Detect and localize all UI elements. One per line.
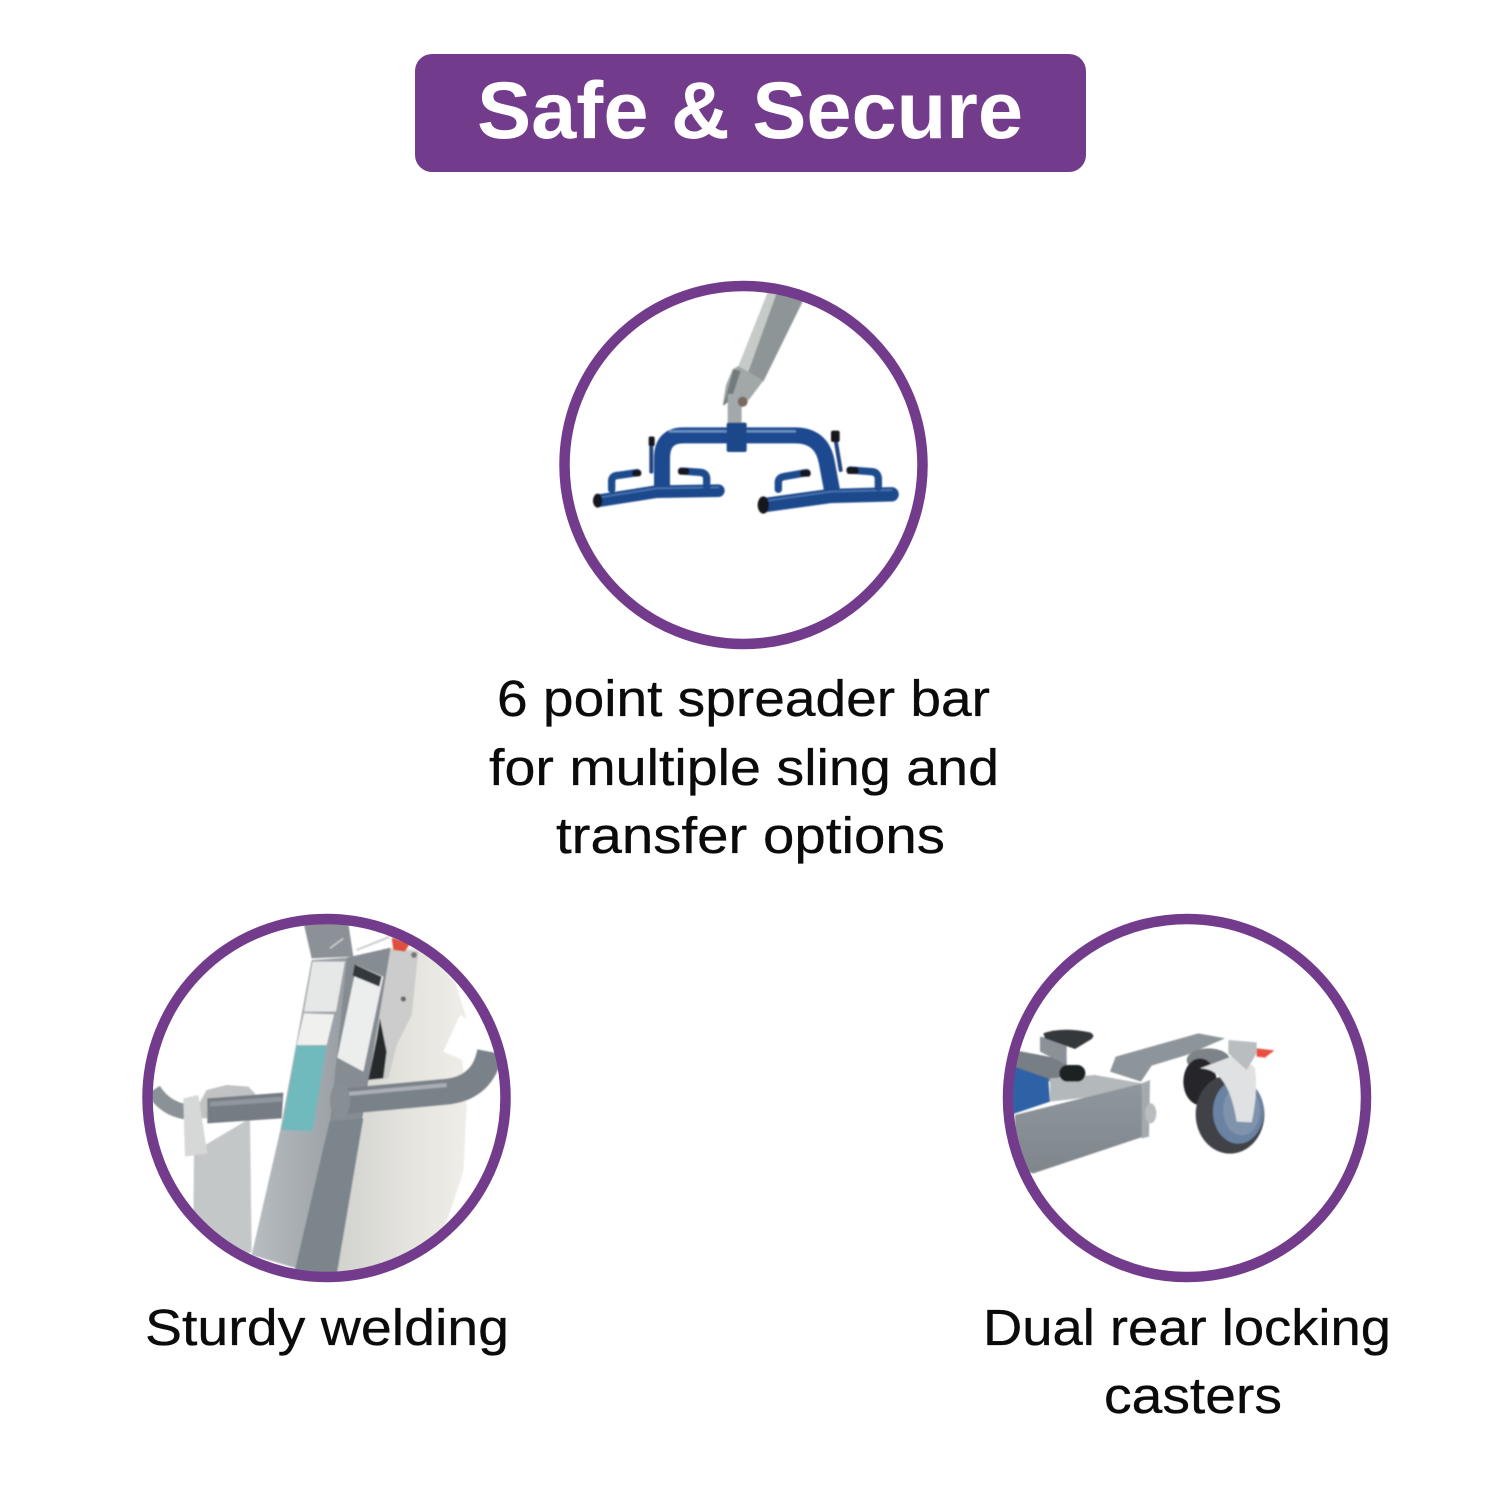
purple ring [148, 919, 506, 1277]
purple ring [1008, 919, 1366, 1277]
caption: locking casters: casters [1104, 1367, 1282, 1424]
panel: spreader bar [489, 286, 999, 864]
panel: sturdy welding [145, 919, 509, 1356]
caption: locking casters: Dual rear locking [983, 1299, 1391, 1356]
icon: caster wheel photo [1005, 1030, 1274, 1173]
caption: locking casters [983, 1299, 1391, 1424]
icon: welded mast photo [153, 922, 503, 1275]
panel: locking casters [983, 919, 1391, 1424]
title: Safe & Secure [477, 66, 1023, 156]
icon: spreader bar photo [593, 287, 892, 514]
caption: spreader bar [489, 670, 999, 864]
caption: spreader bar: for multiple sling and [489, 739, 999, 796]
purple ring [564, 286, 922, 644]
caption: spreader bar: transfer options [556, 807, 945, 864]
caption: spreader bar: 6 point spreader bar [497, 670, 990, 727]
title banner [415, 54, 1086, 172]
caption: sturdy welding: Sturdy welding [145, 1299, 509, 1356]
